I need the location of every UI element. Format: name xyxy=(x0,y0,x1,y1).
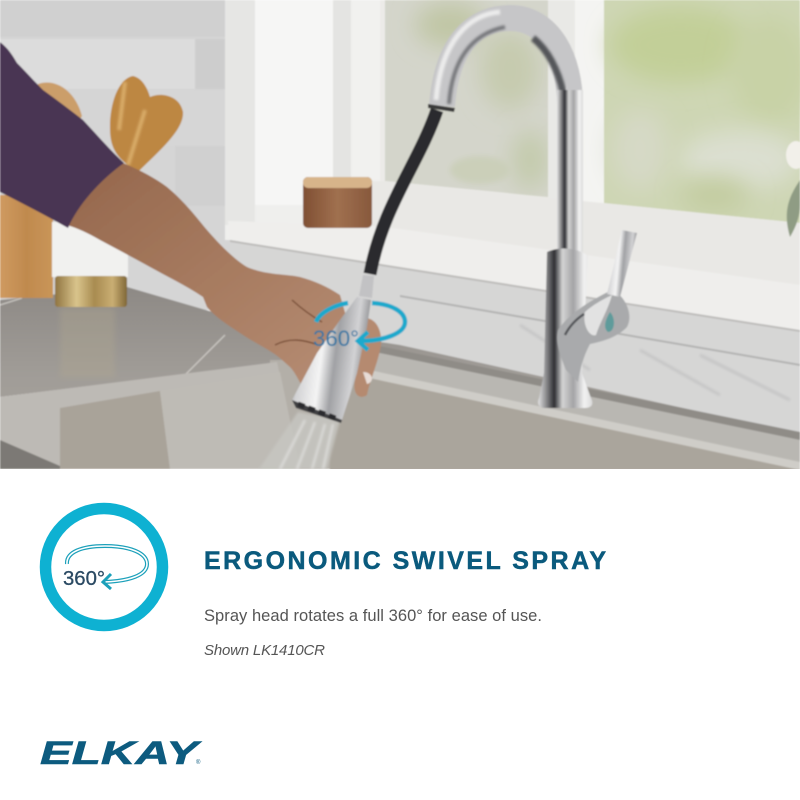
panel: kitchen photo xyxy=(0,0,800,480)
lever handle xyxy=(607,230,637,297)
marble wall xyxy=(0,0,240,310)
360 label: 360° xyxy=(313,326,359,351)
marble backsplash xyxy=(230,242,800,436)
counter and dark back strip xyxy=(0,287,800,480)
faucet body xyxy=(538,249,592,408)
faucet xyxy=(428,12,637,408)
window frame xyxy=(224,0,385,240)
heading: ERGONOMIC SWIVEL SPRAY xyxy=(204,547,606,575)
gooseneck spout xyxy=(430,5,582,107)
icon arrow xyxy=(67,546,147,589)
cutting boards and utensils xyxy=(0,76,183,298)
black hose xyxy=(370,110,437,274)
badge ring xyxy=(46,508,162,626)
arrow head xyxy=(358,332,368,350)
sink basin xyxy=(0,360,800,470)
logo: Elkay: ® xyxy=(196,759,201,766)
logo: Elkay: ELKAY xyxy=(40,735,202,771)
lever teal reflection xyxy=(605,312,614,332)
arm and hand xyxy=(67,163,381,397)
purple sleeve xyxy=(0,42,124,228)
model note: Shown LK1410CR xyxy=(204,642,325,659)
spray head xyxy=(292,275,374,423)
plant leaf xyxy=(786,141,800,237)
window mullion xyxy=(576,0,604,202)
arrow arc xyxy=(316,303,405,341)
spout tip xyxy=(428,104,455,112)
wooden jar xyxy=(303,177,372,228)
lever hub xyxy=(557,290,629,382)
window glass: right pane with blurred foliage xyxy=(604,0,800,223)
window glass: left pane with blurred foliage xyxy=(385,0,548,197)
icon: 360 degree rotation badge xyxy=(46,508,162,626)
body text: Spray head rotates a full 360° for ease of use. xyxy=(204,607,542,625)
360 rotation arrow overlay xyxy=(313,303,405,351)
window sill xyxy=(228,181,800,333)
icon label: 360° xyxy=(63,568,105,590)
logo: Elkay xyxy=(40,735,202,771)
spray of water xyxy=(259,412,340,469)
marble canister with gold base xyxy=(52,222,128,307)
